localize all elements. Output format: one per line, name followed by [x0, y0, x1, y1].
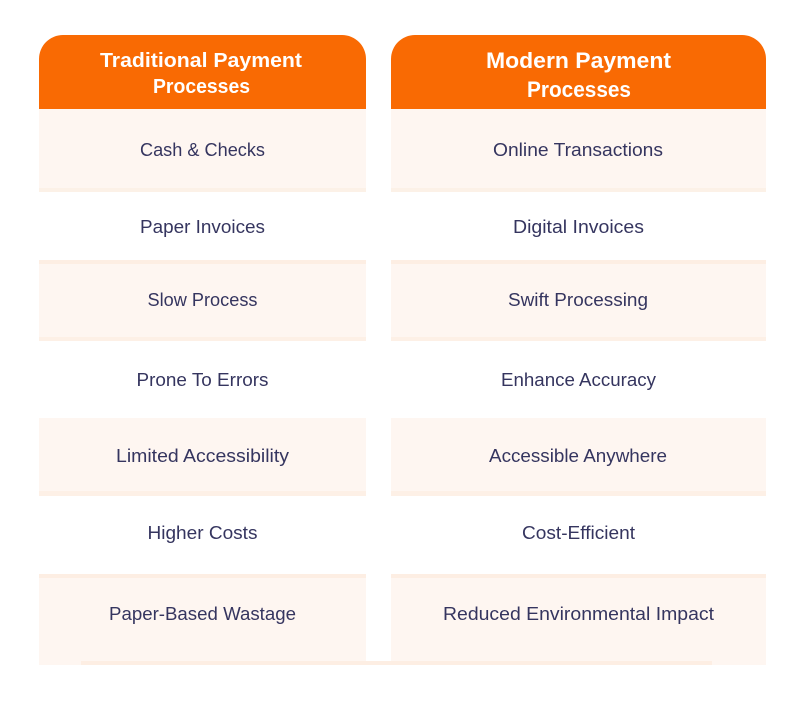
header: traditional payment processes: Processes: [153, 76, 250, 98]
row: cost-efficient: [391, 496, 766, 574]
row: paper invoices: Paper Invoices: [140, 217, 265, 237]
row: paper-based wastage: [39, 574, 366, 665]
row: reduced environmental impact: [391, 574, 766, 665]
row: swift processing: Swift Processing: [508, 290, 648, 310]
row: online transactions: Online Transactions: [493, 140, 663, 160]
row: digital invoices: [391, 192, 766, 260]
panel: traditional payment processes: [39, 35, 366, 665]
row: limited accessibility: Limited Accessibility: [116, 446, 289, 466]
row: online transactions: [391, 109, 766, 192]
header: traditional payment processes: Traditional Payment: [100, 50, 302, 72]
row: accessible anywhere: [391, 418, 766, 496]
row: higher costs: Higher Costs: [148, 523, 258, 543]
row: slow process: Slow Process: [148, 290, 258, 310]
row: enhance accuracy: Enhance Accuracy: [501, 370, 656, 390]
row: enhance accuracy: [391, 341, 766, 418]
row: cost-efficient: Cost-Efficient: [522, 523, 635, 543]
row: cash and checks: Cash & Checks: [140, 140, 265, 160]
row: paper invoices: [39, 192, 366, 260]
row: cash and checks: [39, 109, 366, 192]
row: prone to errors: [39, 341, 366, 418]
header: modern payment processes: Processes: [527, 77, 631, 102]
header: modern payment processes: Modern Payment: [486, 48, 672, 73]
row: higher costs: [39, 496, 366, 574]
header: modern payment processes: [391, 35, 766, 109]
row: limited accessibility: [39, 418, 366, 496]
row: slow process: [39, 260, 366, 341]
row: paper-based wastage: Paper-Based Wastage: [109, 604, 296, 624]
header: traditional payment processes: [39, 35, 366, 109]
row: accessible anywhere: Accessible Anywhere: [489, 446, 667, 466]
row: digital invoices: Digital Invoices: [513, 217, 644, 237]
bottom strip: [81, 661, 712, 665]
row: swift processing: [391, 260, 766, 341]
row: prone to errors: Prone To Errors: [136, 370, 268, 390]
row: reduced environmental impact: Reduced Environmental Impact: [443, 604, 714, 624]
panel: modern payment processes: [391, 35, 766, 665]
